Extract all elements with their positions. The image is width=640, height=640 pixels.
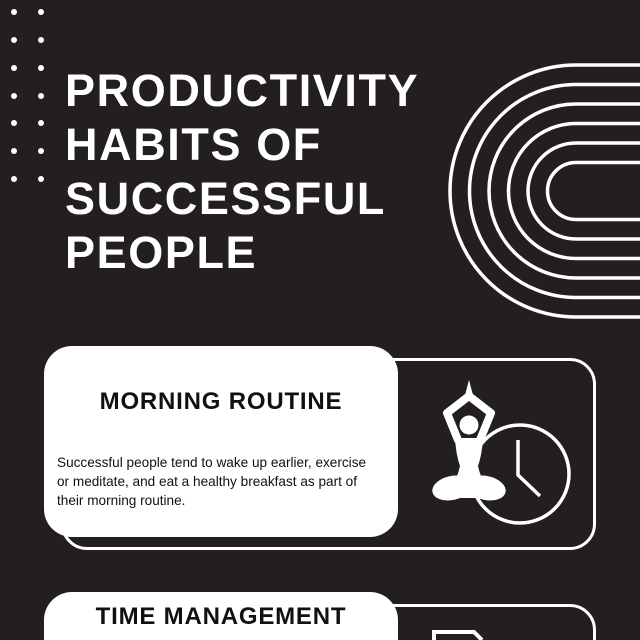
icon: document (432, 630, 484, 640)
title: SUCCESSFUL (65, 173, 386, 224)
text: morning routine body: Successful people tend to wake up earlier, exercise (57, 455, 366, 470)
title (65, 65, 419, 278)
panel: morning routine card (44, 346, 398, 537)
decorative dots (11, 9, 44, 182)
title: HABITS OF (65, 119, 322, 170)
decorative arches (448, 63, 640, 319)
title: PRODUCTIVITY (65, 65, 419, 116)
title: PEOPLE (65, 227, 257, 278)
heading: time management: TIME MANAGEMENT (96, 603, 346, 630)
panel: morning routine outline (61, 358, 596, 550)
panel: time management card (44, 592, 398, 640)
text: morning routine body: or meditate, and eat a healthy breakfast as part of their morning routine. (57, 474, 357, 508)
text: morning routine body (57, 455, 366, 508)
panel: time management outline (61, 604, 596, 640)
heading: morning routine: MORNING ROUTINE (100, 388, 342, 415)
